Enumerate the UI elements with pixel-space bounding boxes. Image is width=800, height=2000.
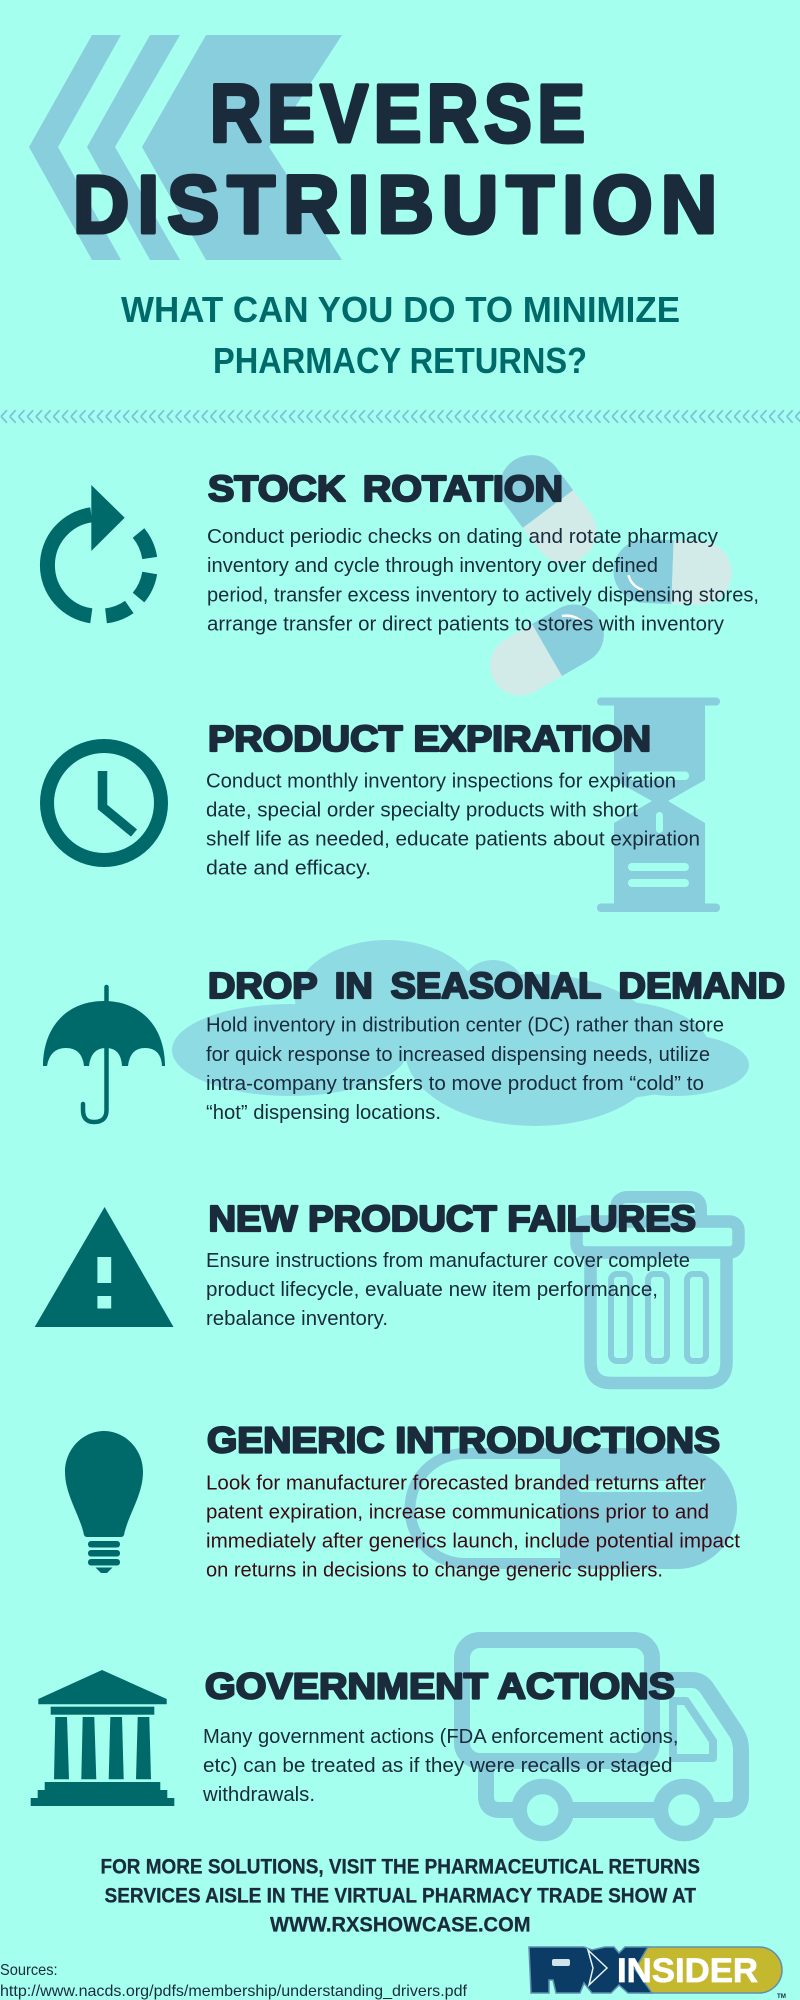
title: DISTRIBUTION xyxy=(73,159,717,250)
heading: NEW PRODUCT FAILURES xyxy=(208,1198,696,1239)
body text xyxy=(206,1250,690,1330)
body text: “hot” dispensing locations. xyxy=(206,1102,441,1124)
subtitle: PHARMACY RETURNS? xyxy=(213,340,587,381)
call to action: FOR MORE SOLUTIONS, VISIT THE PHARMACEUTICAL RETURNS xyxy=(100,1856,700,1878)
heading: PRODUCT EXPIRATION xyxy=(208,718,651,759)
body text xyxy=(207,526,759,636)
sources xyxy=(0,1962,468,2000)
body text: on returns in decisions to change generic suppliers. xyxy=(206,1560,663,1582)
watermark: capsule xyxy=(404,1448,737,1569)
body text: Many government actions (FDA enforcement actions, xyxy=(203,1726,678,1748)
body text: Conduct monthly inventory inspections for expiration xyxy=(206,770,676,792)
watermark: trash can xyxy=(576,1197,738,1383)
body text: patent expiration, increase communications prior to and xyxy=(206,1502,709,1524)
body text xyxy=(202,1726,679,1806)
icon: umbrella xyxy=(43,987,165,1122)
body text: withdrawals. xyxy=(202,1784,315,1806)
body text: arrange transfer or direct patients to stores with inventory xyxy=(207,614,724,636)
body text: intra-company transfers to move product from “cold” to xyxy=(206,1073,704,1095)
body text: immediately after generics launch, include potential impact xyxy=(206,1530,740,1552)
body text: date and efficacy. xyxy=(206,858,371,880)
body text: Conduct periodic checks on dating and rotate pharmacy xyxy=(207,526,718,548)
panel: generic introductions xyxy=(65,1420,740,1582)
panel: product expiration xyxy=(47,698,720,912)
subtitle: WHAT CAN YOU DO TO MINIMIZE xyxy=(121,289,680,330)
logo: RX Insider: INSIDER xyxy=(617,1952,758,1990)
heading: STOCK ROTATION xyxy=(208,468,563,509)
body text: inventory and cycle through inventory over defined xyxy=(207,555,658,577)
body text xyxy=(206,770,700,880)
body text: for quick response to increased dispensing needs, utilize xyxy=(206,1044,710,1066)
subtitle xyxy=(121,289,680,381)
panel: government actions xyxy=(31,1640,741,1834)
logo: RX Insider xyxy=(529,1947,786,2000)
body text: etc) can be treated as if they were recalls or staged xyxy=(203,1755,672,1777)
icon: government building xyxy=(31,1670,174,1806)
logo: RX Insider: TM xyxy=(777,1993,786,2000)
watermark: hourglass xyxy=(597,698,720,912)
call to action: SERVICES AISLE IN THE VIRTUAL PHARMACY TRADE SHOW AT xyxy=(104,1884,696,1908)
title xyxy=(73,68,717,250)
body text: rebalance inventory. xyxy=(206,1308,388,1330)
watermark: cloud xyxy=(172,940,749,1126)
watermark: truck xyxy=(462,1640,741,1834)
call to action xyxy=(100,1856,700,1936)
icon: clock xyxy=(47,746,161,860)
watermark: pills xyxy=(479,443,733,706)
body text: period, transfer excess inventory to actively dispensing stores, xyxy=(207,584,759,606)
body text: shelf life as needed, educate patients about expiration xyxy=(206,828,700,850)
body text: product lifecycle, evaluate new item performance, xyxy=(206,1279,658,1301)
sources: Sources: xyxy=(0,1962,58,1979)
body text: Hold inventory in distribution center (DC) rather than store xyxy=(206,1014,724,1036)
sources: http://www.nacds.org/pdfs/membership/understanding_drivers.pdf xyxy=(0,1983,468,2000)
icon: light bulb xyxy=(65,1431,143,1573)
body text: date, special order specialty products with short xyxy=(206,800,638,822)
body text xyxy=(206,1014,724,1124)
body text: Ensure instructions from manufacturer cover complete xyxy=(206,1250,690,1272)
icon: rotate arrow xyxy=(47,485,150,616)
heading: GENERIC INTRODUCTIONS xyxy=(207,1420,720,1460)
body text xyxy=(206,1472,740,1582)
body text: Look for manufacturer forecasted branded returns after xyxy=(206,1472,706,1494)
header: chevron backdrop xyxy=(29,35,342,260)
call to action: WWW.RXSHOWCASE.COM xyxy=(270,1914,530,1936)
panel: drop in seasonal demand xyxy=(43,940,785,1126)
panel: new product failures xyxy=(35,1197,738,1383)
panel: stock rotation xyxy=(47,443,759,706)
heading: DROP IN SEASONAL DEMAND xyxy=(208,965,785,1006)
title: REVERSE xyxy=(210,68,585,160)
heading: GOVERNMENT ACTIONS xyxy=(205,1666,675,1706)
icon: warning triangle xyxy=(35,1207,174,1327)
